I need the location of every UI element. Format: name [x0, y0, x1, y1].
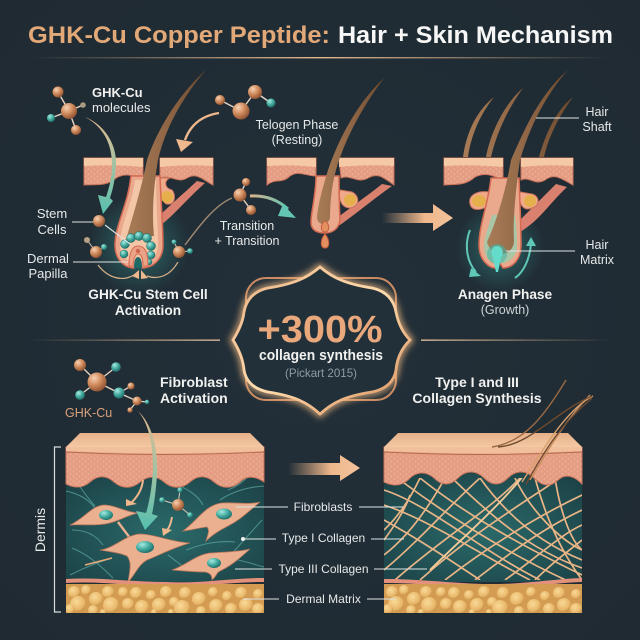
panel: left skin block: [65, 411, 264, 616]
heading: collagen synthesis: Collagen Synthesis: [412, 390, 542, 406]
label: telogen phase: (Resting): [272, 133, 322, 147]
panel: telogen follicle: [267, 78, 394, 248]
main arrow into dermis: [136, 411, 158, 530]
skin section: [444, 158, 503, 185]
label: dermal papilla: Papilla: [28, 266, 68, 281]
arrector muscle: [157, 181, 205, 226]
label: dermal papilla: Dermal: [27, 251, 69, 266]
skin section right: [160, 158, 213, 185]
dermal matrix fat layer: [65, 584, 264, 616]
collagen network: [384, 478, 582, 582]
top surface: [66, 433, 264, 447]
arrow: telogen to anagen: [382, 204, 453, 231]
small arrows: [132, 480, 172, 530]
heading: stem cell activation: Activation: [115, 303, 181, 318]
heading: collagen synthesis: Type I and III: [435, 374, 519, 390]
follicle sheath: [479, 178, 521, 268]
label: telogen phase: [256, 118, 338, 147]
heading: stem cell activation: GHK-Cu Stem Cell: [88, 287, 208, 302]
hair shaft: [127, 70, 206, 236]
sebaceous gland: [339, 190, 358, 208]
small hair shafts: [463, 88, 573, 157]
dermis: [384, 470, 582, 582]
bracket: dermis: Dermis: [32, 508, 48, 552]
label: transition: Transition: [220, 219, 274, 233]
club root drops: [321, 221, 329, 248]
fibroblast cell 1: [70, 505, 138, 525]
heading: anagen phase: Anagen Phase: [458, 287, 553, 302]
label: GHK-Cu molecules: GHK-Cu: [92, 85, 143, 100]
title: GHK-Cu Copper Peptide:: [28, 22, 330, 49]
growth arrows: [467, 230, 531, 278]
heading: fibroblast activation: Activation: [160, 390, 228, 406]
heading: stem cell activation: [88, 287, 208, 318]
label: hair matrix: Matrix: [580, 253, 615, 267]
panel: stem cell activation follicle: [84, 70, 213, 295]
label: hair shaft: Shaft: [582, 120, 612, 134]
fibroblast cell 4: [172, 549, 250, 580]
arrector muscle: [520, 184, 567, 232]
label: stem cells: Stem: [37, 206, 67, 221]
epidermis: [384, 447, 582, 485]
heading: fibroblast activation: Fibroblast: [160, 374, 228, 390]
stem cell ring: [120, 232, 156, 265]
basement membrane: [66, 578, 264, 586]
small molecules and curved feeders: [84, 237, 193, 279]
panel: anagen follicle: [444, 70, 573, 292]
icon: GHK-Cu molecule 1: [47, 86, 86, 135]
label: GHK-Cu molecules: molecules: [92, 100, 151, 115]
label: dermal papilla: [27, 251, 128, 281]
stat value: +300%: [258, 309, 382, 351]
label: stem cells: [37, 206, 130, 244]
dermal matrix fat layer: [383, 584, 582, 616]
hair shaft: [317, 78, 384, 224]
heading: anagen phase: (Growth): [481, 303, 529, 317]
label: fibroblasts: Fibroblasts: [294, 500, 352, 514]
heading: collagen synthesis: [412, 374, 542, 406]
sebaceous glands: [470, 192, 490, 210]
label: type I collagen: [241, 531, 404, 545]
badge outer frame: [246, 278, 396, 400]
transition molecule and arrows: [185, 178, 296, 245]
small molecule: [159, 487, 193, 518]
dermal papilla: [129, 246, 148, 266]
teal glow around bulb: [89, 195, 189, 295]
label: transition: [215, 219, 280, 248]
title: [28, 22, 613, 49]
follicle sheath: [115, 176, 163, 268]
stat caption: collagen synthesis: [259, 347, 383, 364]
icon: GHK-Cu molecule lower: [74, 359, 149, 413]
arrow: peach to hair: [176, 113, 219, 152]
bracket: dermis: [32, 447, 61, 612]
skin section left: [84, 158, 143, 185]
follicle sheath: [311, 176, 340, 233]
skin section: [267, 158, 316, 185]
badge scalloped border: [233, 267, 410, 414]
hair shaft: [487, 70, 568, 254]
label: hair shaft: Hair: [586, 105, 608, 119]
label: stem cells: Cells: [38, 222, 67, 237]
icon: GHK-Cu molecule 2: [215, 85, 276, 120]
top surface: [384, 433, 582, 447]
fibroblast cell 3: [183, 502, 260, 541]
sebaceous gland: [159, 178, 174, 204]
label: hair matrix: [506, 238, 615, 267]
label: type I collagen: Type I Collagen: [282, 531, 365, 545]
label: telogen phase: Telogen Phase: [256, 118, 338, 132]
label: GHK-Cu molecules: [92, 85, 151, 115]
label: hair shaft: [536, 105, 612, 134]
basement membrane: [384, 578, 582, 588]
panel: right skin block: [383, 380, 593, 616]
teal glow: [456, 204, 544, 292]
label: dermal matrix: Dermal Matrix: [286, 592, 361, 606]
heading: fibroblast activation: [160, 374, 228, 406]
arrow: skin block to skin block: [288, 455, 360, 481]
growing hair strands: [492, 380, 593, 484]
arrow: teal to stem cells: [85, 117, 116, 214]
badge: +300% collagen synthesis: [233, 267, 410, 414]
fibroblast cell 2: [100, 534, 190, 582]
badge glow: [233, 267, 410, 414]
epidermis: [66, 447, 264, 487]
heading: anagen phase: [458, 287, 553, 317]
stat source: (Pickart 2015): [285, 366, 357, 380]
label: transition: + Transition: [215, 234, 280, 248]
label: type III collagen: Type III Collagen: [278, 562, 369, 576]
title: Hair + Skin Mechanism: [338, 22, 613, 49]
dermis: [66, 470, 264, 582]
arrector muscle: [331, 184, 392, 231]
label: GHK-Cu: GHK-Cu: [65, 406, 112, 420]
hair matrix: [487, 244, 507, 264]
collagen wisps: [66, 476, 264, 578]
label: hair matrix: Hair: [586, 238, 608, 252]
